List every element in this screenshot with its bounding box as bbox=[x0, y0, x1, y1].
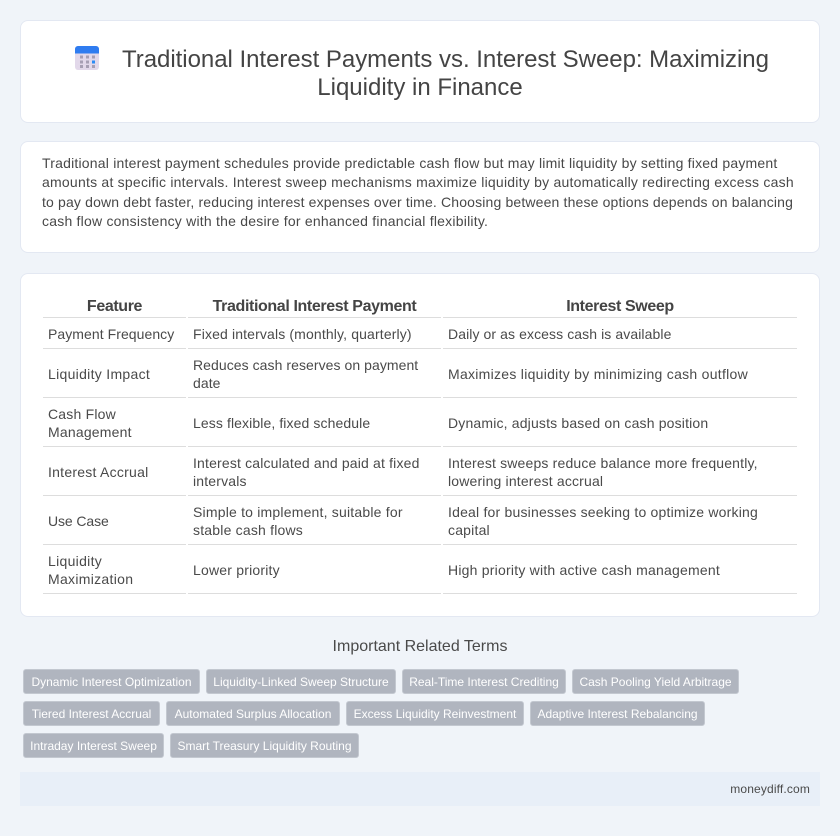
row: liquidity maximization bbox=[48, 553, 720, 587]
footer source: moneydiff.com bbox=[730, 782, 810, 796]
row: use case: Use Case bbox=[48, 513, 109, 529]
row: interest accrual bbox=[48, 455, 758, 489]
row: use case: Ideal for businesses seeking to optimize working bbox=[448, 504, 758, 520]
row: use case: Simple to implement, suitable for bbox=[193, 504, 403, 520]
row: liquidity impact: date bbox=[193, 375, 220, 391]
title bbox=[122, 46, 769, 101]
row: use case: stable cash flows bbox=[193, 522, 303, 538]
row: liquidity impact: Reduces cash reserves on payment bbox=[193, 357, 418, 373]
row: liquidity maximization: Maximization bbox=[48, 571, 133, 587]
row: cash flow management: Management bbox=[48, 424, 132, 440]
row: cash flow management: Less flexible, fixed schedule bbox=[193, 415, 370, 431]
intro paragraph: Traditional interest payment schedules provide predictable cash flow but may limit liquidity by setting fixed payment bbox=[42, 155, 777, 171]
panel: related term tags: Automated Surplus Allocation bbox=[175, 707, 331, 721]
panel: related term tags: Cash Pooling Yield Arbitrage bbox=[579, 675, 732, 689]
row: payment frequency: Payment Frequency bbox=[48, 326, 174, 342]
intro paragraph: cash flow consistency with the desire for enhanced financial flexibility. bbox=[42, 213, 488, 229]
icon: calendar bbox=[75, 46, 99, 70]
row: payment frequency bbox=[48, 326, 671, 342]
table header row bbox=[87, 298, 674, 315]
table header row: Interest Sweep bbox=[566, 298, 674, 315]
row: interest accrual: Interest calculated and paid at fixed bbox=[193, 455, 420, 471]
panel: related term tags: Liquidity-Linked Sweep Structure bbox=[213, 675, 389, 689]
row: liquidity impact bbox=[48, 357, 748, 391]
panel: related term tags: Dynamic Interest Optimization bbox=[31, 675, 192, 689]
intro paragraph bbox=[42, 155, 794, 229]
row: use case bbox=[48, 504, 758, 538]
row: interest accrual: Interest Accrual bbox=[48, 464, 148, 480]
row: cash flow management: Dynamic, adjusts based on cash position bbox=[448, 415, 708, 431]
panel: related term tags: Smart Treasury Liquidity Routing bbox=[177, 739, 352, 753]
row: interest accrual: Interest sweeps reduce balance more frequently, bbox=[448, 455, 758, 471]
title: Traditional Interest Payments vs. Interest Sweep: Maximizing bbox=[122, 46, 769, 73]
panel: header bbox=[20, 20, 820, 123]
panel: related term tags: Adaptive Interest Rebalancing bbox=[537, 707, 698, 721]
panel: related term tags: Intraday Interest Sweep bbox=[30, 739, 157, 753]
table header row: Traditional Interest Payment bbox=[213, 298, 416, 315]
intro paragraph: amounts at specific intervals. Interest sweep mechanisms maximize liquidity by automatically redirecting excess cash bbox=[42, 174, 794, 190]
row: liquidity maximization: Liquidity bbox=[48, 553, 102, 569]
row: liquidity maximization: High priority with active cash management bbox=[448, 562, 720, 578]
footer bar bbox=[20, 772, 820, 806]
heading: related terms: Important Related Terms bbox=[333, 638, 507, 655]
row: interest accrual: lowering interest accrual bbox=[448, 473, 603, 489]
row: liquidity impact: Liquidity Impact bbox=[48, 366, 150, 382]
panel: comparison table bbox=[20, 273, 820, 617]
row: payment frequency: Daily or as excess cash is available bbox=[448, 326, 671, 342]
row: cash flow management: Cash Flow bbox=[48, 406, 116, 422]
row: interest accrual: intervals bbox=[193, 473, 247, 489]
title: Liquidity in Finance bbox=[317, 74, 523, 101]
row: cash flow management bbox=[48, 406, 708, 440]
table header row: Feature bbox=[87, 298, 142, 315]
row: use case: capital bbox=[448, 522, 490, 538]
panel: related term tags bbox=[23, 669, 739, 758]
row: payment frequency: Fixed intervals (monthly, quarterly) bbox=[193, 326, 412, 342]
row: liquidity maximization: Lower priority bbox=[193, 562, 280, 578]
intro paragraph: to pay down debt faster, reducing interest expenses over time. Choosing between these options depends on balancing bbox=[42, 194, 793, 210]
panel: intro text bbox=[20, 141, 820, 253]
row: liquidity impact: Maximizes liquidity by minimizing cash outflow bbox=[448, 366, 748, 382]
panel: related term tags: Excess Liquidity Reinvestment bbox=[354, 707, 516, 721]
panel: related term tags: Real-Time Interest Crediting bbox=[409, 675, 559, 689]
panel: related term tags: Tiered Interest Accrual bbox=[32, 707, 151, 721]
